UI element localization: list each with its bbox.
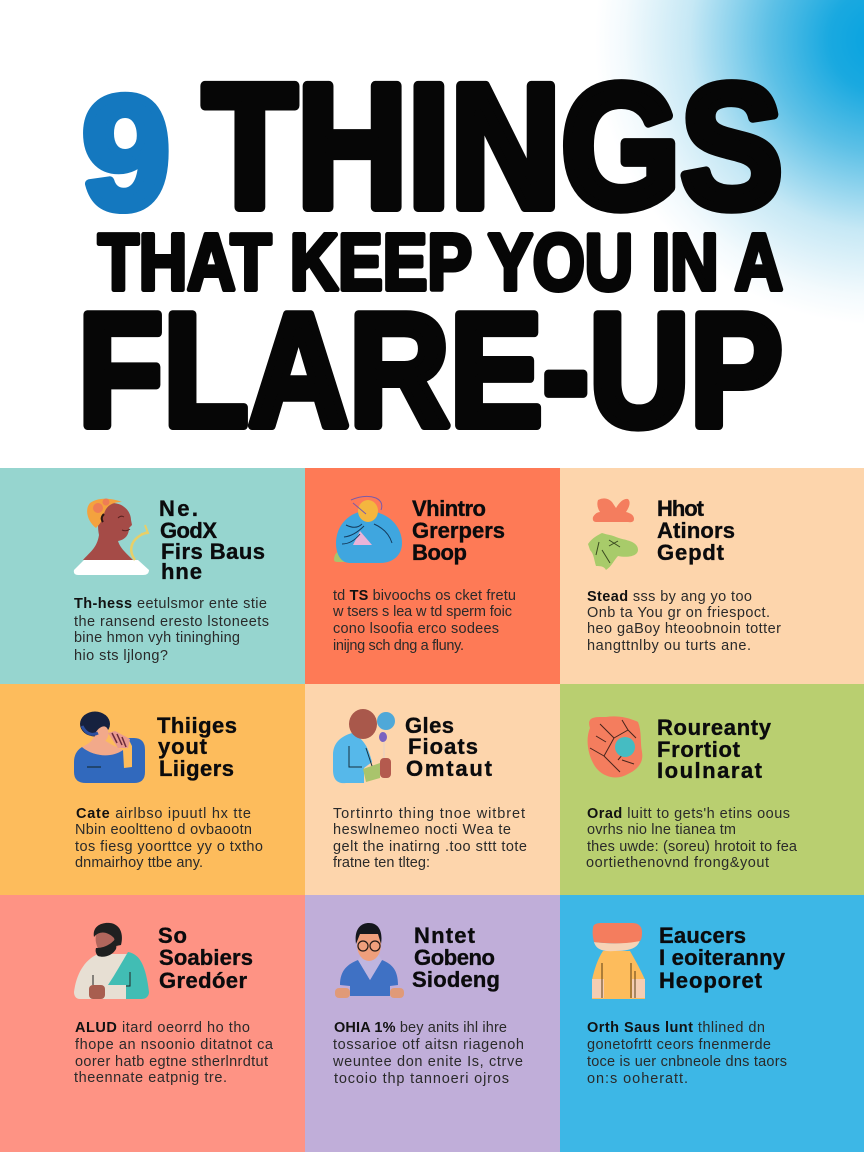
card 2 heading: Grerpers [412, 518, 505, 543]
card 1 body text: bine hmon vyh tininghing [74, 630, 240, 646]
card 9 body text [587, 1020, 787, 1087]
card 5 heading: Omtaut [406, 756, 493, 781]
card 1 heading: Ne. [159, 496, 198, 521]
card 8 heading: Gobeno [414, 945, 495, 970]
panel: card 1 teal [0, 468, 305, 684]
card 5 body text: fratne ten tlteg: [333, 855, 430, 871]
panel: card 5 peach [305, 684, 560, 895]
card 8 body text [332, 1020, 524, 1087]
card 2 body text: cono lsoofia erco sodees [333, 621, 499, 637]
card 4 heading: Thiiges [157, 713, 237, 738]
card 6 heading [657, 715, 772, 783]
card 3 heading: Atinors [657, 518, 735, 543]
card 3 body text: Stead sss by ang yo too [587, 589, 752, 605]
card 8 heading [412, 923, 500, 992]
card 4 heading: Liigers [159, 756, 234, 781]
card 7 heading: Gredóer [159, 968, 247, 993]
panel: card 3 peach [560, 468, 864, 684]
card 7 heading [158, 923, 253, 993]
card 3 body text: heo gaBoy hteoobnoin totter [587, 621, 781, 637]
icon: person with flower hair [74, 498, 149, 575]
card 5 body text: heswlnemeo nocti Wea te [333, 822, 511, 838]
card 6 heading: Frortiot [657, 737, 741, 762]
card 5 body text: gelt the inatirng .too sttt tote [333, 839, 527, 855]
card 9 body text: Orth Saus lunt thlined dn [587, 1020, 765, 1036]
card 2 body text [332, 588, 516, 654]
card 7 heading: Soabiers [159, 945, 253, 970]
card 2 heading: Vhintro [412, 496, 486, 521]
icon: man with flower [333, 709, 395, 783]
card 1 body text: the ransend eresto lstoneets [74, 614, 269, 630]
card 6 body text: thes uwde: (soreu) hrotoit to fea [587, 839, 798, 855]
icon: cracked coral skin with teal spot [588, 716, 642, 777]
card 4 body text: Cate airlbso ipuutl hx tte [76, 806, 251, 822]
title line: FLARE-UP: FLARE-UP [78, 280, 783, 460]
card 6 body text [586, 806, 798, 871]
icon: person holding head [74, 712, 145, 783]
card 1 heading: GodX [160, 518, 217, 543]
card 9 body text: on:s ooheratt. [587, 1071, 688, 1087]
card 6 body text: Orad luitt to gets'h etins oous [587, 806, 790, 822]
card 4 body text: Nbin eooltteno d ovbaootn [75, 822, 252, 838]
card 3 heading [657, 496, 735, 565]
card 1 body text: hio sts ljlong? [74, 648, 168, 664]
panel: card 9 blue [560, 895, 864, 1152]
card 6 heading: Ioulnarat [657, 758, 763, 783]
card 7 body text: ALUD itard oeorrd ho tho [75, 1020, 250, 1036]
panel: card 7 salmon [0, 895, 305, 1152]
card 7 body text: theennate eatpnig tre. [74, 1070, 227, 1086]
card 5 heading: Gles [405, 713, 454, 738]
card 4 body text: dnmairhoy ttbe any. [75, 855, 203, 871]
icon: coral and green leaves [588, 498, 638, 570]
card 8 body text: tocoio thp tannoeri ojros [334, 1071, 509, 1087]
panel: card 2 coral [305, 468, 560, 684]
card 9 heading: Heoporet [659, 968, 763, 993]
card 2 heading: Boop [412, 540, 467, 565]
background gradient: top right blue glow [590, 0, 864, 330]
icon: man with glasses [335, 923, 404, 998]
card 6 heading: Roureanty [657, 715, 772, 740]
card 3 heading: Gepdt [657, 540, 725, 565]
card 6 body text: ovrhs nio lne tianea tm [587, 822, 736, 838]
title line: THAT KEEP YOU IN A: THAT KEEP YOU IN A [98, 217, 783, 307]
icon: figure with orange shirt [592, 923, 645, 999]
card 4 body text [75, 806, 263, 871]
icon: blue blob with yellow figure [334, 496, 402, 563]
card 2 heading [412, 496, 505, 565]
card 8 body text: tossarioe otf aitsn riagenoh [333, 1037, 524, 1053]
panel: card 6 green [560, 684, 864, 895]
card 1 body text [74, 596, 269, 664]
card 3 body text [587, 589, 781, 654]
card 9 heading: I eoiteranny [659, 945, 786, 970]
card 8 heading: Siodeng [412, 967, 500, 992]
card 5 heading [405, 713, 493, 781]
card 9 heading: Eaucers [659, 923, 746, 948]
card 8 heading: Nntet [414, 923, 476, 948]
card 9 body text: toce is uer cnbneole dns taors [587, 1054, 787, 1070]
card 1 body text: Th-hess eetulsmor ente stie [74, 596, 267, 612]
card 5 heading: Fioats [408, 734, 478, 759]
card 1 heading: Firs Baus [161, 539, 265, 564]
card 7 body text: fhope an nsoonio ditatnot ca [75, 1037, 274, 1053]
card 6 body text: oortiethenovnd frong&yout [586, 855, 769, 871]
icon: bearded man [74, 923, 149, 999]
card 3 body text: Onb ta You gr on friespoct. [587, 605, 770, 621]
card 2 body text: inijng sch dng a fluny. [333, 638, 464, 654]
card 9 body text: gonetofrtt ceors fnenmerde [587, 1037, 771, 1053]
panel: card 8 lavender [305, 895, 560, 1152]
card 2 body text: td TS bivoochs os cket fretu [333, 588, 516, 604]
title number 9: 9 [82, 63, 170, 242]
title [78, 48, 783, 460]
card 4 body text: tos fiesg yoorttce yy o txtho [75, 839, 263, 855]
card 1 heading: hne [161, 559, 202, 584]
title line: THINGS: THINGS [203, 48, 783, 244]
card 7 body text [74, 1020, 274, 1086]
card 4 heading [157, 713, 237, 781]
card 5 body text: Tortinrto thing tnoe witbret [333, 806, 525, 822]
card 5 body text [333, 806, 527, 871]
card 1 heading [159, 496, 265, 584]
card 7 heading: So [158, 923, 187, 948]
panel: card 4 amber [0, 684, 305, 895]
card 2 body text: w tsers s lea w td sperm foic [332, 604, 512, 620]
card 4 heading: yout [158, 734, 208, 759]
card 9 heading [659, 923, 786, 993]
card 3 heading: Hhot [657, 496, 705, 521]
card 8 body text: weuntee don enite Is, ctrve [332, 1054, 523, 1070]
card 7 body text: oorer hatb egtne stherlnrdtut [75, 1054, 268, 1070]
card 8 body text: OHIA 1% bey anits ihl ihre [334, 1020, 507, 1036]
card 3 body text: hangttnlby ou turts ane. [587, 638, 751, 654]
